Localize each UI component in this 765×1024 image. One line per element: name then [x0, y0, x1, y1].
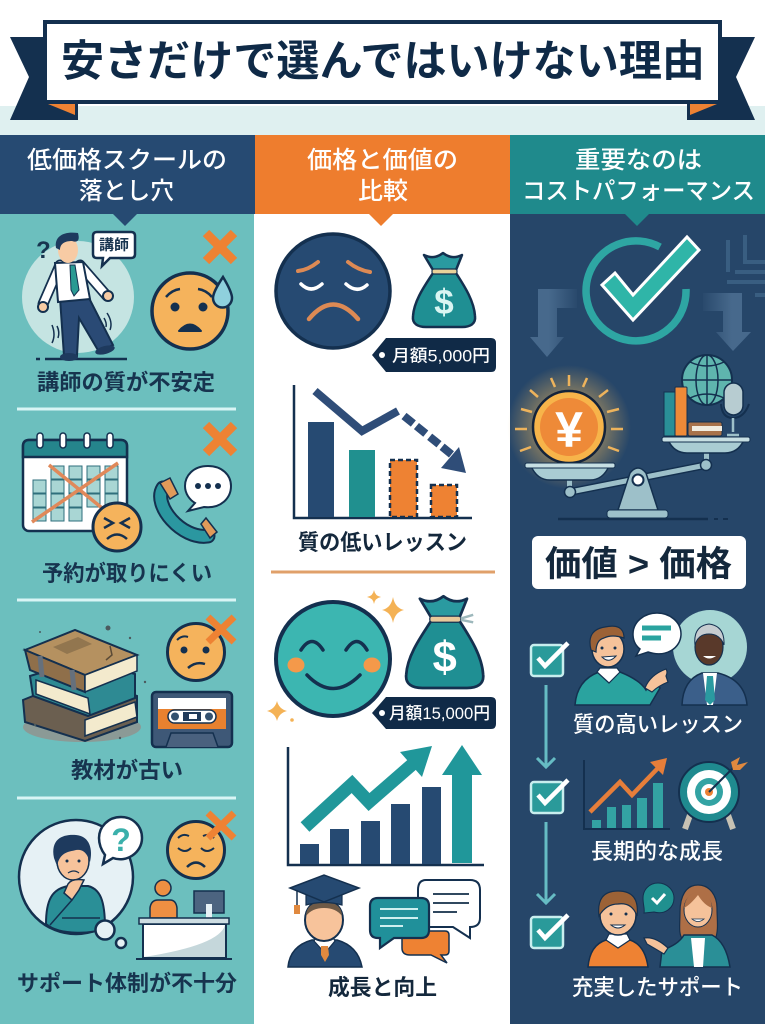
icon: student and supporter — [588, 883, 730, 967]
header: price vs value: 価格と価値の — [307, 147, 458, 174]
label: teacher quality: 講師の質が不安定 — [37, 370, 215, 395]
header: low price schools: 落とし穴 — [79, 178, 174, 205]
icon: worried face — [152, 273, 232, 349]
panel: cost performance — [507, 135, 765, 1024]
icon: question bubble: ? — [111, 822, 131, 858]
icon: sad face — [168, 822, 224, 878]
icon: unstable teacher: ? — [36, 237, 51, 264]
speech bubble: teacher: 講師 — [99, 236, 129, 254]
icon: large money bag: $ — [433, 634, 457, 682]
bar chart: growth — [288, 745, 484, 865]
icon: confused face — [168, 624, 224, 680]
icon: reception desk — [136, 880, 232, 959]
icon: x mark — [206, 233, 234, 261]
icon: thinking person — [19, 820, 133, 934]
icon: two men talking — [575, 610, 747, 705]
icon: speech bubbles — [370, 880, 480, 963]
header: cost performance — [510, 135, 765, 226]
decorative faint lines — [727, 235, 765, 295]
icon: sparkles — [267, 590, 404, 722]
label: long term growth: 長期的な成長 — [591, 839, 723, 864]
icon: speech bubble dots — [185, 466, 231, 511]
chart: long term growth — [584, 758, 670, 829]
icon: x mark — [208, 617, 234, 642]
icon: calendar — [23, 433, 127, 531]
icon: small money bag: $ — [434, 283, 454, 322]
label: low quality lesson: 質の低いレッスン — [298, 530, 467, 555]
label: old materials: 教材が古い — [71, 758, 183, 783]
icon: small money bag — [413, 253, 475, 327]
value over price box — [532, 536, 746, 589]
arrow: faint right — [703, 293, 751, 351]
title banner — [10, 22, 755, 120]
icon: question bubble — [99, 817, 142, 864]
icon: large money bag — [406, 596, 483, 688]
icon: graduate — [288, 875, 362, 967]
header: price vs value — [255, 135, 510, 226]
header: low price schools — [0, 135, 255, 226]
icon: old books — [23, 626, 146, 742]
icon: balance scale — [525, 437, 750, 519]
header: low price schools: 低価格スクールの — [27, 147, 227, 174]
background band — [0, 106, 765, 136]
icon: cassette tape — [152, 692, 232, 747]
title text: 安さだけで選んではいけない理由 — [61, 38, 705, 86]
icon: thought circles — [96, 920, 126, 948]
header: cost performance: コストパフォーマンス — [522, 178, 755, 205]
label: hard to book: 予約が取りにくい — [42, 561, 212, 586]
price tag: 15,000 yen: 月額15,000円 — [389, 704, 490, 723]
header: price vs value: 比較 — [358, 178, 408, 205]
icon: globe books microphone — [664, 355, 749, 436]
icon: x mark — [206, 425, 234, 453]
value over price box: 価値 > 価格 — [545, 545, 732, 584]
bar chart: declining quality — [294, 385, 472, 518]
icon: unstable teacher — [22, 232, 135, 361]
flow: checks and arrows — [531, 643, 568, 948]
icon: angry face — [93, 503, 141, 551]
header: cost performance: 重要なのは — [575, 147, 702, 174]
icon: yen coin — [507, 365, 631, 489]
icon: telephone — [160, 478, 217, 538]
price tag: 15,000 yen — [372, 697, 496, 729]
panel: low price schools — [0, 135, 255, 1024]
label: full support: 充実したサポート — [572, 975, 743, 1000]
icon: happy face — [276, 602, 390, 716]
label: high quality lesson: 質の高いレッスン — [573, 712, 743, 737]
icon: sad dark face — [276, 234, 390, 348]
price tag: 5,000 yen: 月額5,000円 — [392, 346, 490, 366]
icon: x mark — [208, 813, 234, 838]
icon: yen coin: ¥ — [555, 402, 583, 458]
icon: circled check — [586, 237, 699, 341]
panel: price vs value — [254, 135, 510, 1024]
label: insufficient support: サポート体制が不十分 — [17, 971, 237, 996]
arrow: faint left — [530, 289, 577, 357]
label: growth and improvement: 成長と向上 — [328, 975, 437, 1000]
price tag: 5,000 yen — [372, 338, 496, 372]
icon: target — [679, 757, 748, 829]
